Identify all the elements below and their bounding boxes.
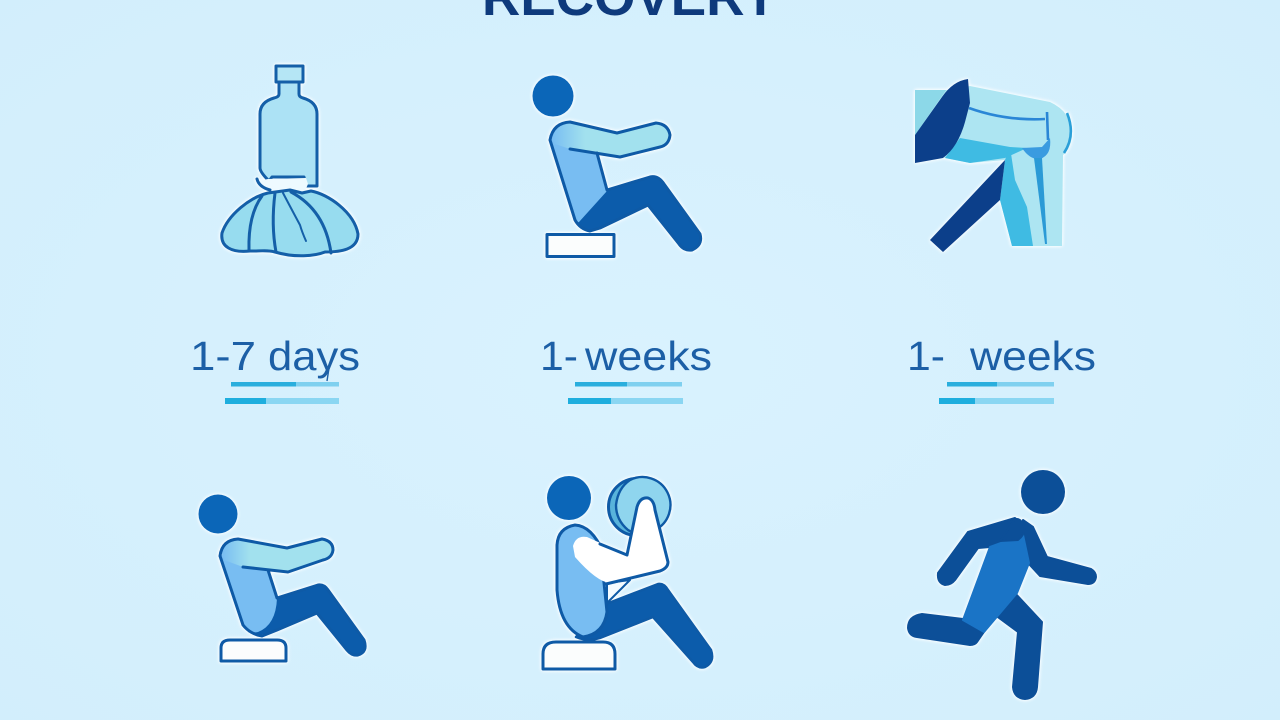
head <box>532 76 574 116</box>
label: 1-weeks: weeks <box>584 333 712 379</box>
kneecap <box>1022 138 1050 159</box>
icon: running person <box>908 470 1096 699</box>
arm <box>221 539 333 572</box>
label: 1- weeks <box>907 333 1096 379</box>
progress bars: column 2 <box>568 382 683 404</box>
head <box>547 476 591 520</box>
label: 1- weeks: weeks <box>969 333 1096 379</box>
icon: knee joint <box>915 79 1072 252</box>
outline <box>220 539 365 655</box>
seat <box>543 642 615 669</box>
label: 1-weeks: 1- <box>540 333 578 379</box>
arm <box>573 498 668 583</box>
shoulder <box>1000 519 1024 541</box>
label: 1-7 days: days <box>268 333 360 379</box>
leg <box>575 177 701 250</box>
torso <box>550 125 607 222</box>
thigh cuff <box>915 79 970 163</box>
front arm <box>1022 520 1096 584</box>
leg <box>248 585 365 655</box>
back leg <box>908 614 990 645</box>
outline <box>550 122 701 250</box>
tendons <box>969 108 1048 140</box>
progress bars: column 1 <box>225 382 339 404</box>
back arm <box>938 518 1023 585</box>
shin muscle <box>1000 147 1033 246</box>
head <box>198 494 238 534</box>
icon: seated person reaching forward <box>532 76 701 256</box>
seat <box>547 234 614 256</box>
arm brace <box>607 580 630 603</box>
torso <box>220 545 277 632</box>
arm outline <box>600 498 668 584</box>
thigh corner <box>915 90 946 135</box>
shin bone <box>1034 158 1047 244</box>
front leg <box>995 593 1042 699</box>
progress bars: column 3 <box>939 382 1054 404</box>
thigh underside <box>945 138 1027 163</box>
torso <box>963 535 1029 632</box>
arm <box>551 122 670 157</box>
label: 1-7 days <box>190 333 360 381</box>
label: 1-7 days: 1-7 <box>190 333 256 379</box>
icon: seated person holding ball <box>543 476 712 669</box>
label: 1- weeks: 1- <box>907 333 945 379</box>
label: 1-weeks <box>540 333 712 379</box>
torso <box>557 525 607 637</box>
thigh and shin <box>915 86 1072 246</box>
icon: ice bag with bottle <box>222 66 358 256</box>
icon: seated person, raised seat <box>198 494 365 661</box>
head <box>1021 470 1065 514</box>
leg <box>576 584 712 667</box>
seat <box>221 640 286 661</box>
lower leg band <box>930 160 1005 252</box>
ball <box>608 477 670 536</box>
